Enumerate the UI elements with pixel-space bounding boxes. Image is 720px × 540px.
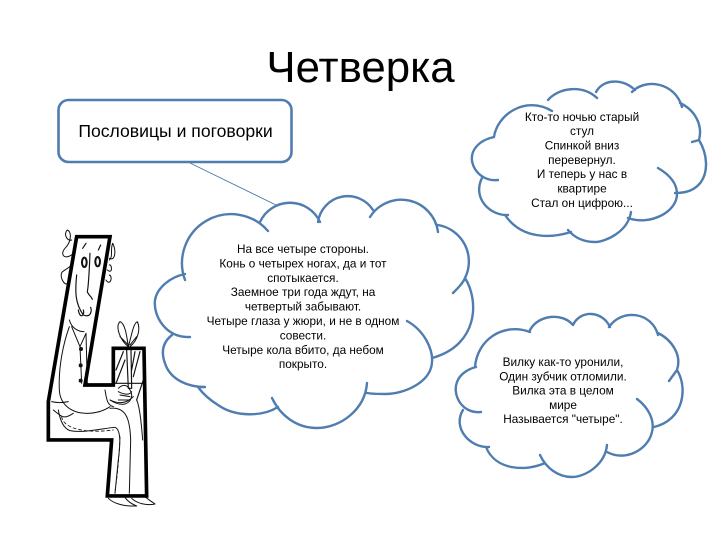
hair curls xyxy=(61,230,115,284)
proverbs text: спотыкается. xyxy=(267,271,339,285)
panel: large proverbs cloud xyxy=(155,196,473,428)
proverbs text: совести. xyxy=(280,328,326,342)
riddle text xyxy=(499,355,627,426)
dashed seam xyxy=(62,417,120,492)
proverbs text: Четыре глаза у жюри, и не в одном xyxy=(207,314,399,328)
body and clothes xyxy=(52,320,143,493)
proverbs text xyxy=(207,242,399,371)
riddle text: квартире xyxy=(557,182,607,196)
hand xyxy=(110,385,132,404)
proverbs text: Конь о четырех ногах, да и тот xyxy=(219,256,387,270)
gift ribbon and stripes xyxy=(113,350,143,400)
title: Четверка xyxy=(266,43,455,92)
riddle text: мире xyxy=(549,398,577,412)
shoes xyxy=(108,497,155,506)
proverbs text: покрыто. xyxy=(279,357,327,371)
gift bow xyxy=(118,322,139,347)
riddle text: Называется "четыре". xyxy=(503,412,623,426)
proverbs text: Четыре кола вбито, да небом xyxy=(222,343,384,357)
riddle text: И теперь у нас в xyxy=(537,167,627,181)
proverbs text: На все четыре стороны. xyxy=(237,242,369,256)
riddle text: Стал он цифрою... xyxy=(531,196,633,210)
illustration: man shaped like number four xyxy=(48,230,155,506)
face xyxy=(76,243,101,316)
riddle text xyxy=(525,110,639,210)
cloud outline xyxy=(456,314,683,477)
cloud outline xyxy=(155,196,473,428)
proverbs text: Заемное три года ждут, на xyxy=(231,285,376,299)
panel: proverbs heading box: Пословицы и поговорки xyxy=(78,121,273,141)
proverbs text: четвертый забывают. xyxy=(245,300,361,314)
panel: top right riddle cloud xyxy=(472,82,706,242)
riddle text: Спинкой вниз xyxy=(545,138,619,152)
riddle text: Один зубчик отломили. xyxy=(499,369,627,383)
eyes xyxy=(82,257,100,267)
panel: bottom right riddle cloud xyxy=(456,314,683,477)
riddle text: Вилку как-то уронили, xyxy=(503,355,623,369)
jacket buttons xyxy=(79,347,83,383)
riddle text: стул xyxy=(570,124,594,138)
panel: proverbs heading box xyxy=(58,100,292,162)
thick number 4 outline xyxy=(48,237,147,496)
riddle text: Вилка эта в целом xyxy=(512,384,614,398)
cloud outline xyxy=(472,82,706,242)
riddle text: перевернул. xyxy=(548,153,616,167)
connector line from box to cloud xyxy=(190,163,278,206)
riddle text: Кто-то ночью старый xyxy=(525,110,639,124)
